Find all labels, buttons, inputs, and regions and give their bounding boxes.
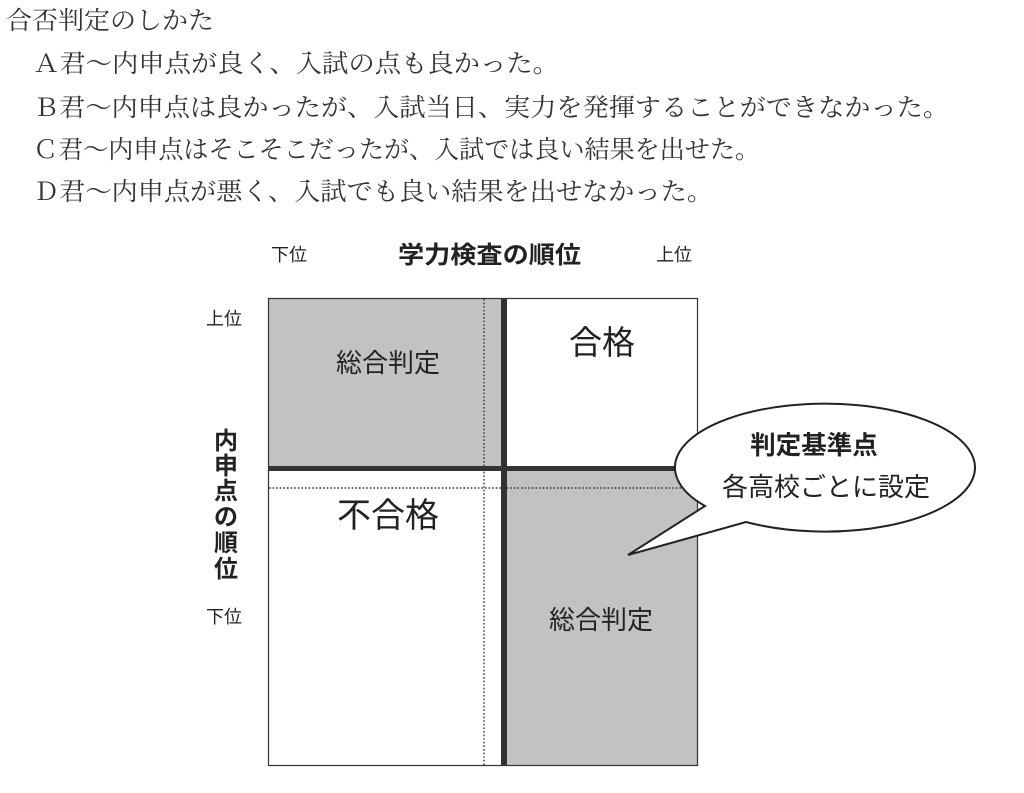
top axis labels [271, 242, 692, 269]
label: fail: 不合格 [337, 497, 439, 535]
axis title: report card rank: 点 [214, 478, 238, 505]
callout subtitle: 各高校ごとに設定 [722, 472, 930, 502]
axis title: academic test rank: 学力検査の順位 [398, 242, 581, 269]
label: comprehensive judgment top: 総合判定 [336, 348, 440, 378]
label: upper: 上位 [656, 245, 692, 265]
line C: Ｃ君〜内申点はそこそこだったが、入試では良い結果を出せた。 [33, 136, 760, 164]
axis title: report card rank: 位 [214, 556, 238, 583]
heading: 合否判定のしかた [6, 7, 214, 35]
callout title: 判定基準点 [750, 432, 878, 460]
axis title: report card rank [214, 428, 238, 583]
label: upper: 上位 [206, 309, 242, 329]
axis title: report card rank: の [214, 504, 238, 531]
dotted line horizontal [269, 487, 698, 489]
decision matrix [268, 298, 698, 766]
left axis labels [206, 309, 242, 627]
thick vertical line [501, 299, 507, 765]
axis title: report card rank: 内 [214, 428, 238, 455]
label: pass: 合格 [569, 324, 635, 361]
label: lower: 下位 [206, 607, 242, 627]
axis title: report card rank: 順 [214, 530, 238, 557]
label: lower: 下位 [271, 245, 307, 265]
intro text block [6, 7, 949, 206]
matrix outline [268, 298, 698, 766]
line D: Ｄ君〜内申点が悪く、入試でも良い結果を出せなかった。 [33, 178, 713, 206]
label: comprehensive judgment bottom: 総合判定 [549, 605, 653, 635]
line B: Ｂ君〜内申点は良かったが、入試当日、実力を発揮することができなかった。 [33, 94, 949, 122]
quadrant: top-left grey [269, 299, 504, 468]
line A: Ａ君〜内申点が良く、入試の点も良かった。 [33, 50, 559, 78]
axis title: report card rank: 申 [214, 453, 238, 480]
speech bubble shape [628, 404, 975, 555]
callout [628, 404, 975, 555]
quadrant: bottom-right grey [504, 468, 698, 765]
thick horizontal line [269, 466, 698, 471]
dotted line vertical [483, 299, 485, 765]
